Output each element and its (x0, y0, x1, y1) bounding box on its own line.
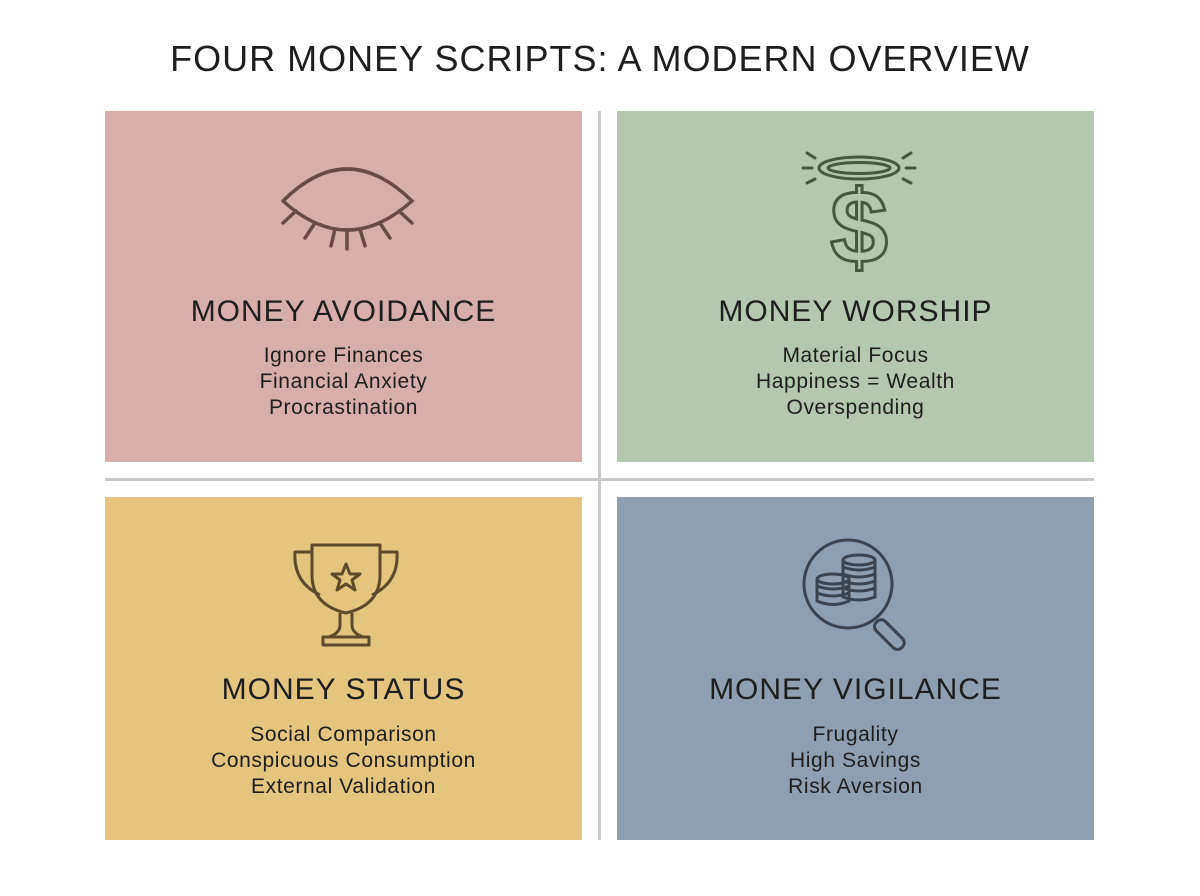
icon: closed eye (281, 167, 414, 251)
heading: MONEY WORSHIP (718, 295, 993, 328)
text block: Overspending (787, 396, 924, 419)
panel: money avoidance (105, 111, 582, 462)
text block: Frugality (813, 723, 898, 746)
icon: trophy (293, 544, 399, 646)
text block (756, 344, 955, 419)
text block: Conspicuous Consumption (211, 749, 476, 772)
text block: Financial Anxiety (260, 370, 427, 393)
text block: Social Comparison (250, 723, 437, 746)
text block: Material Focus (782, 344, 929, 367)
text block: Risk Aversion (788, 775, 923, 798)
text block: Procrastination (269, 396, 418, 419)
text block: External Validation (251, 775, 436, 798)
text block: Ignore Finances (264, 344, 423, 367)
text block (260, 344, 427, 419)
panel: money worship (617, 111, 1094, 462)
title: FOUR MONEY SCRIPTS: A MODERN OVERVIEW (170, 38, 1030, 79)
panel: money status (105, 497, 582, 840)
text block: Happiness = Wealth (756, 370, 955, 393)
icon: magnifier with coins (802, 538, 906, 651)
icon: haloed dollar: $ (830, 170, 888, 286)
panel: money vigilance (617, 497, 1094, 840)
text block (788, 723, 923, 798)
text block (211, 723, 476, 798)
text block: High Savings (790, 749, 921, 772)
heading: MONEY STATUS (222, 673, 465, 706)
heading: MONEY AVOIDANCE (191, 295, 496, 328)
icon: haloed dollar (802, 151, 916, 286)
heading: MONEY VIGILANCE (709, 673, 1002, 706)
